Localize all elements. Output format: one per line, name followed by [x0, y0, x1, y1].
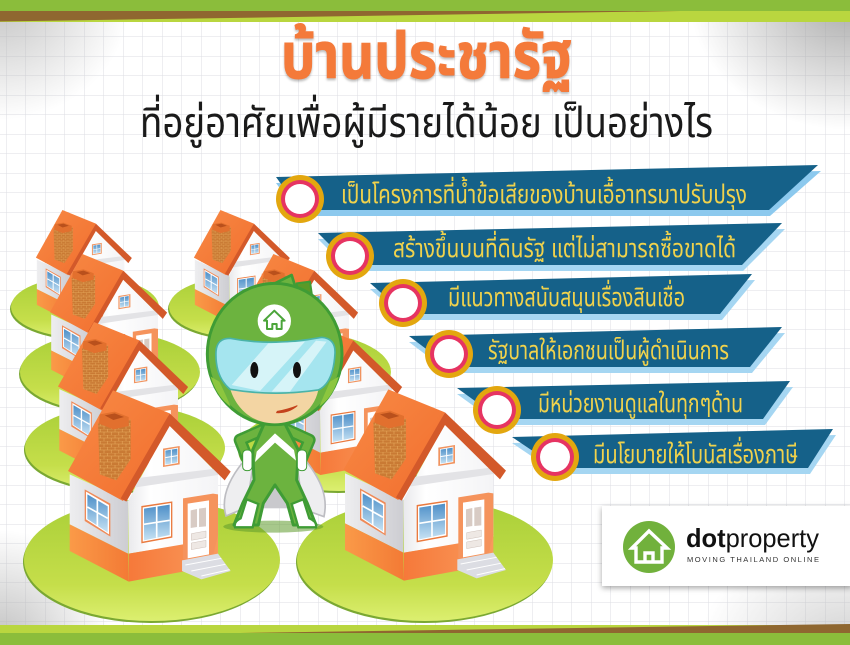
title: บ้านประชารัฐ [281, 20, 572, 92]
banner 6 [512, 429, 836, 481]
lawn and house 3 [24, 322, 225, 493]
lawn and house 8 [296, 389, 553, 623]
banner list [276, 165, 836, 481]
banner 1 [276, 165, 821, 223]
subtitle: ที่อยู่อาศัยเพื่อผู้มีรายได้น้อย เป็นอย่างไร [140, 94, 713, 148]
right house group [168, 210, 553, 623]
mascot character [207, 275, 342, 533]
logo card [602, 506, 850, 586]
lawn and house 6 [210, 254, 391, 414]
banner 3 [370, 274, 755, 327]
banner 1: เป็นโครงการที่น้ำข้อเสียของบ้านเอื้อาทรมาปรับปรุง [341, 176, 747, 210]
lawn and house 7 [238, 322, 439, 493]
banner 3: มีแนวทางสนับสนุนเรื่องสินเชื่อ [448, 279, 685, 313]
left house group [10, 210, 280, 623]
logo tagline: MOVING THAILAND ONLINE [687, 555, 819, 564]
top ribbon [0, 0, 850, 22]
lawn and house 2 [19, 254, 200, 414]
logo wordmark: dotproperty [686, 523, 819, 553]
banner 2: สร้างขึ้นบนที่ดินรัฐ แต่ไม่สามารถซื้อขาดได้ [393, 230, 736, 263]
banner 4 [409, 327, 785, 378]
logo icon [623, 521, 675, 573]
lawn and house 4 [23, 390, 280, 623]
bottom ribbon [0, 624, 850, 645]
banner 5 [457, 381, 793, 434]
lawn and house 1 [10, 210, 159, 340]
banner 2 [318, 223, 785, 280]
banner 5: มีหน่วยงานดูแลในทุกๆด้าน [538, 388, 743, 419]
lawn and house 5 [168, 210, 317, 340]
banner 4: รัฐบาลให้เอกชนเป็นผู้ดำเนินการ [488, 335, 729, 366]
